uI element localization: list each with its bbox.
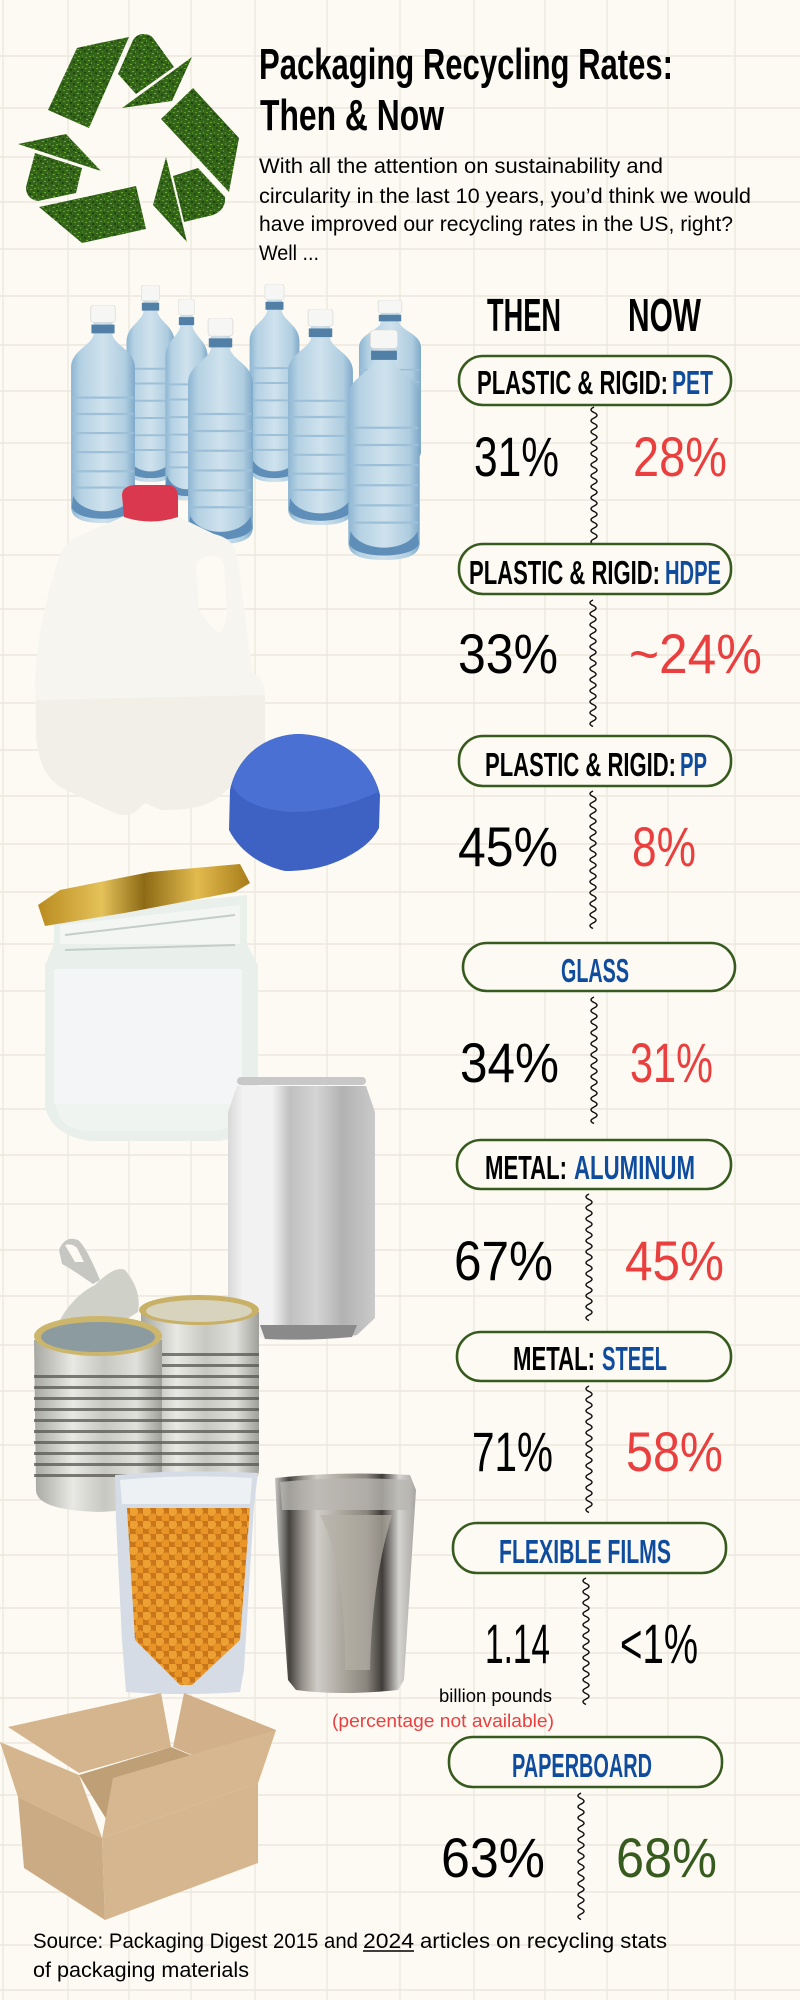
- intro text: circularity in the last 10 years, you’d think we would: [259, 185, 751, 208]
- left can body: [34, 1340, 162, 1512]
- now value: aluminum: 45%: [625, 1229, 724, 1292]
- then value: paperboard: 63%: [441, 1826, 545, 1889]
- image: water bottles (PET): [71, 284, 421, 560]
- image: blue bottle cap (PP): [229, 734, 380, 871]
- icon: grass recycling symbol: [18, 34, 239, 243]
- now value: flexible films: <1%: [620, 1612, 698, 1675]
- divider: [578, 1793, 584, 1920]
- pill: metal steel: METAL:: [513, 1340, 595, 1377]
- unit note: billion pounds: [439, 1686, 552, 1706]
- divider: [586, 1194, 592, 1320]
- then value: glass: 34%: [460, 1031, 559, 1094]
- image: glass jar with gold lid: [38, 864, 258, 1141]
- then value: flexible films: 1.14: [485, 1612, 550, 1675]
- pill: metal aluminum: [457, 1140, 731, 1189]
- column heading: then: THEN: [487, 289, 561, 341]
- now value: PP: 8%: [632, 815, 696, 878]
- then value: PET: 31%: [474, 425, 559, 488]
- percentage note: (percentage not available): [332, 1711, 554, 1731]
- divider: [586, 1386, 592, 1512]
- image: clear pouch with chickpeas: [115, 1471, 258, 1694]
- now value: glass: 31%: [630, 1031, 713, 1094]
- then value: HDPE: 33%: [458, 622, 558, 685]
- pill: plastic PET: [459, 356, 731, 405]
- image: foil pouch: [275, 1474, 416, 1693]
- divider: [583, 1578, 589, 1704]
- intro text: have improved our recycling rates in the US, right?: [259, 213, 733, 236]
- pill: flexible films: FLEXIBLE FILMS: [499, 1533, 671, 1570]
- divider: [591, 997, 597, 1124]
- image: cardboard box: [0, 1693, 276, 1920]
- now value: steel: 58%: [626, 1420, 723, 1483]
- divider: [590, 600, 596, 726]
- image: milk jug (HDPE): [35, 485, 265, 815]
- image: steel food cans: [34, 1239, 259, 1512]
- intro text: With all the attention on sustainability and: [259, 155, 663, 178]
- pill: plastic PP: [459, 736, 731, 786]
- pill: metal steel: [457, 1332, 731, 1381]
- pill: metal aluminum: ALUMINUM: [574, 1149, 695, 1186]
- pill: paperboard: PAPERBOARD: [512, 1747, 652, 1784]
- intro text: Well ...: [259, 242, 319, 265]
- pill: paperboard: [449, 1737, 722, 1787]
- right can body: [141, 1312, 259, 1497]
- title: Then & Now: [260, 91, 445, 140]
- column heading: now: NOW: [628, 289, 701, 341]
- divider: [591, 407, 597, 544]
- then value: steel: 71%: [472, 1420, 553, 1483]
- then value: PP: 45%: [458, 815, 558, 878]
- pill: plastic HDPE: [459, 544, 731, 594]
- divider: [590, 791, 596, 928]
- pill: glass: GLASS: [561, 952, 629, 989]
- pill: metal aluminum: METAL:: [485, 1149, 567, 1186]
- pill: plastic HDPE: PLASTIC & RIGID:: [469, 554, 660, 591]
- pill: metal steel: STEEL: [602, 1340, 667, 1377]
- pull ring and open lid: [59, 1239, 100, 1284]
- pill: glass: [463, 943, 735, 991]
- pill: flexible films: [453, 1523, 726, 1573]
- pill: plastic PP: PLASTIC & RIGID:: [485, 746, 676, 783]
- then value: aluminum: 67%: [454, 1229, 553, 1292]
- pill: plastic PET: PLASTIC & RIGID:: [477, 364, 668, 401]
- now value: paperboard: 68%: [616, 1826, 717, 1889]
- intro text: [259, 155, 751, 265]
- source note: [33, 1930, 667, 1982]
- source note: 2024: [363, 1930, 414, 1953]
- source note: Source: Packaging Digest 2015 and: [33, 1930, 358, 1953]
- pill: plastic HDPE: HDPE: [665, 554, 721, 591]
- pill: plastic PET: PET: [672, 364, 713, 401]
- image: aluminum can: [228, 1077, 375, 1340]
- pill: plastic PP: PP: [680, 746, 707, 783]
- now value: HDPE: ~24%: [629, 622, 762, 685]
- source note: articles on recycling stats: [420, 1930, 667, 1953]
- title: [259, 40, 673, 140]
- now value: PET: 28%: [633, 425, 727, 488]
- source note: of packaging materials: [33, 1959, 249, 1982]
